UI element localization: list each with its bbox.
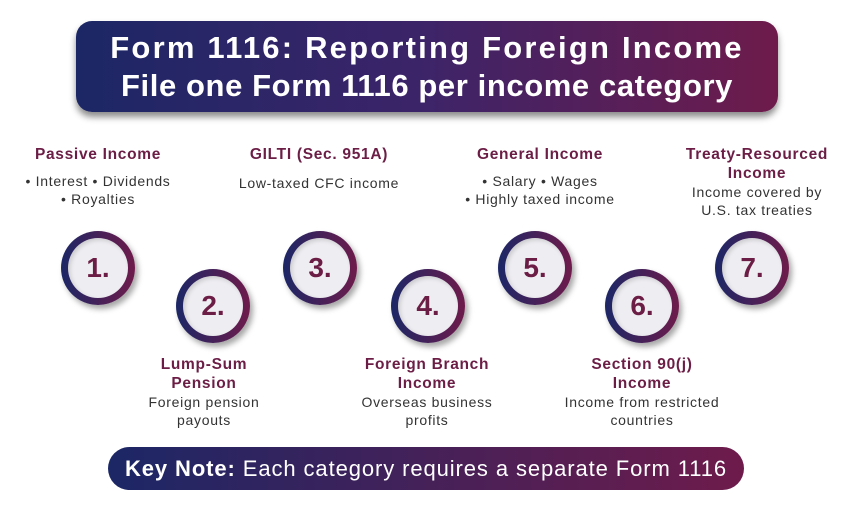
item 3 text xyxy=(239,146,399,191)
item 2 text: Pension xyxy=(171,375,237,392)
item 2 text: Lump-Sum xyxy=(161,356,247,373)
item 5 text: • Salary • Wages xyxy=(482,173,598,189)
item 3 text: Low-taxed CFC income xyxy=(239,175,399,191)
item 7 text: Income covered by xyxy=(692,184,822,200)
circle 2: 2. xyxy=(201,290,225,321)
circle 6: 6. xyxy=(630,290,654,321)
item 2 text: payouts xyxy=(177,412,231,428)
item 7 text: Treaty-Resourced xyxy=(686,146,828,163)
circle 3: 3. xyxy=(308,252,332,283)
circle 5 xyxy=(498,231,572,305)
item 4 text: Income xyxy=(398,375,456,392)
item 1 text: • Interest • Dividends xyxy=(25,173,171,189)
item 4 text: profits xyxy=(405,412,449,428)
item 6 text: countries xyxy=(610,412,674,428)
item 6 text: Section 90(j) xyxy=(591,356,693,373)
circle 6 xyxy=(605,269,679,343)
item 7 text: Income xyxy=(728,165,786,182)
circle 4 xyxy=(391,269,465,343)
item 7 text: U.S. tax treaties xyxy=(701,202,813,218)
circle 7: 7. xyxy=(740,252,764,283)
circle 2 xyxy=(176,269,250,343)
circle 4: 4. xyxy=(416,290,440,321)
item 6 text: Income from restricted xyxy=(565,394,719,410)
item 2 text: Foreign pension xyxy=(149,394,259,410)
title: Form 1116: Reporting Foreign Income xyxy=(110,30,744,65)
item 6 text xyxy=(565,356,719,428)
item 1 text: • Royalties xyxy=(61,191,135,207)
item 4 text: Foreign Branch xyxy=(365,356,489,373)
item 4 text: Overseas business xyxy=(362,394,492,410)
circle 7 xyxy=(715,231,789,305)
title xyxy=(76,21,778,112)
item 5 text: General Income xyxy=(477,146,603,163)
key note xyxy=(108,447,744,490)
circle 5: 5. xyxy=(523,252,547,283)
circle 1 xyxy=(61,231,135,305)
item 4 text xyxy=(362,356,492,428)
item 3 text: GILTI (Sec. 951A) xyxy=(250,146,388,163)
item 7 text xyxy=(686,146,828,218)
key note: Key Note: Each category requires a separate Form 1116 xyxy=(125,456,727,481)
circle 3 xyxy=(283,231,357,305)
item 5 text: • Highly taxed income xyxy=(465,191,615,207)
title: File one Form 1116 per income category xyxy=(121,68,733,103)
circle 1: 1. xyxy=(86,252,110,283)
item 5 text xyxy=(465,146,615,207)
item 6 text: Income xyxy=(613,375,671,392)
item 1 text xyxy=(25,146,171,207)
item 1 text: Passive Income xyxy=(35,146,161,163)
item 2 text xyxy=(149,356,259,428)
